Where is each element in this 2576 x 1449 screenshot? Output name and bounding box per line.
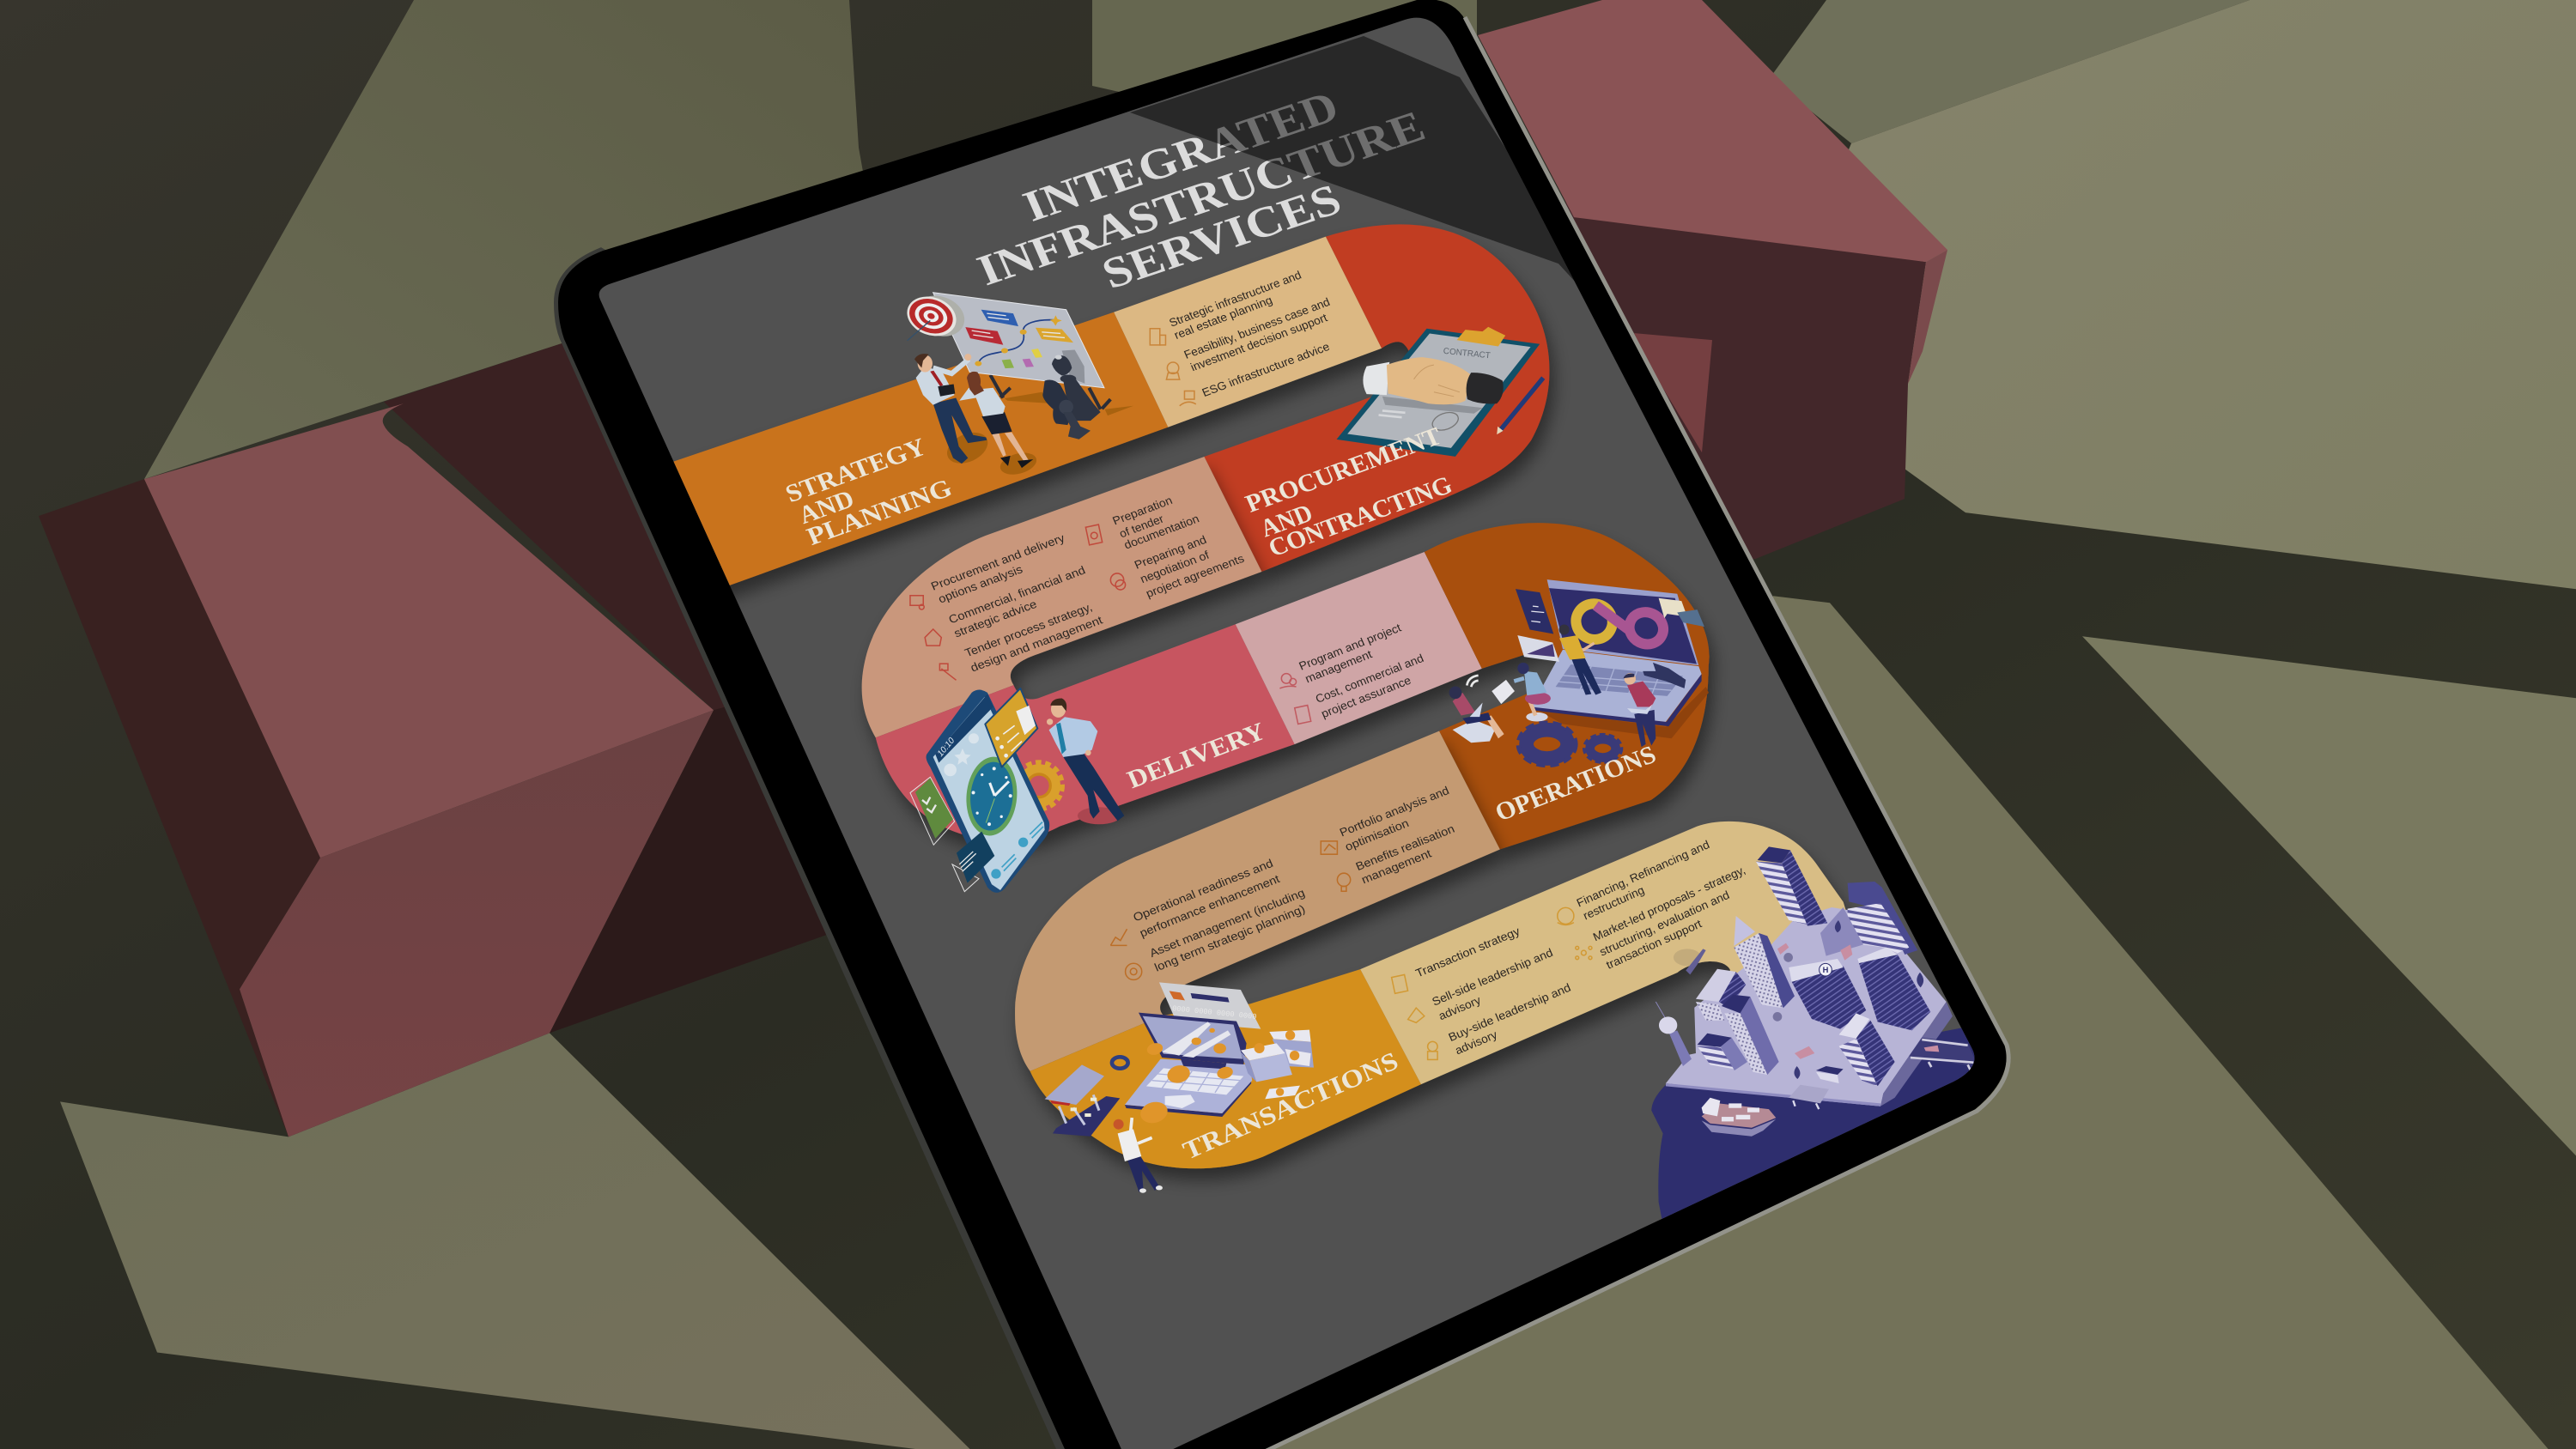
tall tower roof (1758, 846, 1790, 863)
text: operations list (1131, 784, 1456, 974)
procurement list background (862, 457, 1261, 737)
chess highlight (1055, 355, 1062, 360)
strategy list background (1114, 237, 1382, 427)
signature strip (1382, 397, 1483, 414)
trackpad (1165, 1094, 1195, 1108)
heading: strategy and planning: AND (795, 486, 859, 530)
helipad roof (1789, 959, 1844, 982)
title: INFRASTRUCTURE (970, 102, 1432, 295)
text: procurement list: documentation (1122, 512, 1201, 552)
card strip (1191, 993, 1230, 1003)
text: transactions list: structuring, evaluation and (1598, 888, 1731, 959)
icons: procurement list (910, 524, 1126, 680)
text: procurement list: of tender (1117, 512, 1166, 540)
illustration: strategy board (902, 287, 1133, 478)
laptop base edge (1125, 1081, 1251, 1117)
text: strategy list: Strategic infrastructure and (1167, 269, 1303, 330)
key lines (1558, 666, 1677, 695)
person (1114, 1118, 1163, 1193)
operations heading band (1425, 523, 1710, 849)
text: procurement list: design and management (969, 614, 1105, 675)
calendar details (995, 706, 1036, 758)
man at screen (1559, 624, 1601, 695)
key lines (1152, 1070, 1241, 1093)
land front edge (1666, 1083, 1880, 1106)
text: transactions list: Sell-side leadership and (1430, 946, 1555, 1009)
credit card (1159, 982, 1261, 1029)
text: operations list: long term strategic planning) (1152, 902, 1307, 974)
phone screen (933, 697, 1045, 890)
curved roof right (1857, 948, 1898, 963)
tablet body (554, 0, 2008, 1449)
clock second hand (986, 798, 994, 823)
tablet screen (599, 18, 1974, 1449)
contract paper (1347, 333, 1531, 448)
card number: 0000 0000 0000 0000 (1172, 1004, 1257, 1022)
heading: procurement and contracting (1242, 422, 1456, 562)
phone icons (944, 733, 979, 776)
keyboard (1146, 1068, 1243, 1094)
icons: strategy list (1150, 329, 1196, 406)
harbour water (1651, 1028, 1986, 1240)
text: transactions list: Market-led proposals - strategy, (1591, 864, 1747, 943)
infinity loop (1570, 597, 1668, 650)
wifi (1467, 676, 1479, 687)
text: procurement list: strategic advice (952, 597, 1039, 640)
phone body (927, 690, 1049, 893)
side card (1516, 589, 1553, 634)
coins (1138, 1028, 1234, 1126)
finger lines (1414, 365, 1460, 397)
big dark building centre (1792, 966, 1866, 1029)
contract label: CONTRACT (1443, 347, 1491, 361)
procurement heading band (1204, 224, 1550, 572)
pink cars (1777, 943, 1852, 1059)
text: transactions list: transaction support (1604, 917, 1704, 972)
laptop base (1531, 650, 1702, 722)
woman (959, 372, 1033, 468)
illustration: online payment laptop (1045, 982, 1314, 1193)
text: procurement list: Commercial, financial and (946, 564, 1087, 626)
text: procurement list: Tender process strategy, (963, 600, 1094, 659)
pencil (1500, 378, 1543, 431)
land side (1880, 1002, 1953, 1106)
target (907, 295, 965, 336)
text: transactions list: Transaction strategy (1413, 925, 1522, 979)
text: transactions list: restructuring (1582, 883, 1646, 922)
helipad mark: H (1823, 966, 1829, 974)
laptop hinge (1181, 1059, 1226, 1069)
text: operations list: Portfolio analysis and (1338, 784, 1451, 839)
illustration: schedule phone and clock (910, 688, 1124, 893)
icons: transactions list (1392, 907, 1592, 1059)
ribbon (1677, 609, 1704, 627)
pencil tip (1497, 427, 1504, 434)
gears (1518, 723, 1621, 766)
radio tower (1656, 1002, 1692, 1066)
chess shadow (1062, 349, 1084, 384)
loose bill (1265, 1086, 1300, 1099)
transactions list background (1360, 822, 1889, 1084)
illustration: isometric city (1651, 846, 1986, 1240)
panel: transactions band (1015, 731, 1889, 1168)
woman on box (1449, 687, 1504, 743)
man on laptop (1624, 673, 1656, 747)
heading: strategy and planning (787, 438, 951, 546)
text: procurement list: Procurement and delivery (929, 531, 1066, 593)
board (933, 293, 1104, 388)
bridge (1909, 1038, 1975, 1070)
small striped building (1698, 1034, 1747, 1070)
laptop screen frame (1139, 1013, 1247, 1064)
spire tower (1734, 916, 1795, 1008)
phone header (935, 694, 993, 763)
tablet left dark rim (554, 247, 1082, 1449)
heading: operations: OPERATIONS (1492, 741, 1660, 827)
text: procurement list: options analysis (936, 562, 1024, 606)
trees (1773, 920, 1923, 1079)
left pink block (39, 309, 945, 1137)
front right tower (1839, 1013, 1895, 1086)
heading: transactions: TRANSACTIONS (1179, 1047, 1402, 1166)
infographic on screen (649, 36, 1986, 1240)
sticky notes (1002, 349, 1042, 368)
laptop shadow (1537, 687, 1709, 738)
card chip (1170, 991, 1185, 1000)
phone lines (1002, 822, 1043, 871)
clasped hands (1387, 357, 1471, 404)
tablet grey rim (1266, 17, 2008, 1449)
text: transactions list: advisory (1453, 1028, 1499, 1057)
text: delivery list: Program and project (1297, 621, 1403, 673)
text: delivery list: management (1303, 647, 1374, 685)
contract lines (1379, 410, 1406, 417)
panel: delivery band (862, 457, 1710, 849)
market stall (1045, 1064, 1120, 1137)
board legs (990, 375, 1110, 409)
clip (1457, 327, 1505, 346)
small gear (1112, 1057, 1128, 1069)
chart card (1517, 635, 1559, 662)
laptop screen (1143, 1016, 1242, 1059)
helicopter (1674, 949, 1706, 974)
clock (963, 755, 1020, 838)
central plaza block (1820, 907, 1863, 956)
icons: delivery list (1279, 674, 1311, 724)
transactions heading band (1030, 969, 1421, 1168)
text: transactions list: Financing, Refinancing and (1575, 838, 1711, 910)
curved white building (1848, 903, 1909, 953)
top right dark building (1848, 882, 1917, 955)
helipad mark (1820, 963, 1832, 976)
phone status circles (991, 838, 1028, 879)
title: SERVICES (1095, 175, 1348, 299)
text: transactions list: Buy-side leadership and (1447, 981, 1573, 1044)
thinking man (1047, 699, 1124, 824)
money stack back (1269, 1030, 1314, 1068)
text: procurement list: Preparation (1110, 494, 1174, 527)
heading: delivery: DELIVERY (1123, 718, 1269, 794)
heading: strategy and planning: STRATEGY (781, 433, 930, 508)
phone time: 10:10 (936, 736, 957, 759)
delivery list background (1236, 552, 1482, 744)
text: strategy list: real estate planning (1172, 294, 1274, 342)
checklist paper (910, 777, 955, 845)
speech bubble (1659, 598, 1687, 618)
clock hands (990, 781, 1009, 796)
title: INTEGRATED (1017, 82, 1346, 231)
pier (1789, 1085, 1829, 1109)
text: procurement list: Preparing and (1133, 533, 1208, 572)
text: strategy list: ESG infrastructure advice (1200, 340, 1332, 399)
small house (1816, 1066, 1844, 1083)
illustration: laptop operations (1449, 579, 1709, 766)
text: strategy list: investment decision support (1188, 311, 1329, 373)
laptop base edge (1530, 674, 1702, 726)
screen glare (1162, 1022, 1230, 1058)
text: delivery list: project assurance (1319, 674, 1413, 720)
container ship (1702, 1098, 1776, 1137)
sleeve (1363, 362, 1389, 395)
text: procurement list: project agreements (1144, 552, 1246, 600)
tall tower left face (1756, 862, 1807, 925)
cuff (1467, 373, 1504, 403)
middle tower (1722, 995, 1779, 1075)
text: operations list: management (1359, 846, 1433, 886)
roadmap nodes (975, 315, 1062, 366)
roadmap path (978, 320, 1054, 363)
text: delivery list: Cost, commercial and (1314, 652, 1425, 706)
text: transactions list (1413, 838, 1747, 1057)
text: strategy list: Feasibility, business case and (1182, 295, 1332, 361)
stamp (1430, 409, 1461, 433)
text: transactions list: advisory (1437, 993, 1483, 1022)
strategy heading band (649, 312, 1168, 600)
screen reflection (1130, 36, 1631, 343)
operations list background (1015, 731, 1500, 1071)
text: procurement list (929, 494, 1246, 675)
gear (1016, 762, 1062, 809)
chess pieces (1042, 355, 1101, 440)
floor shadows (942, 392, 1133, 478)
left building (1696, 969, 1746, 1021)
text: operations list: Operational readiness and (1131, 857, 1275, 924)
wrench (1643, 663, 1686, 688)
laptop screen (1549, 588, 1697, 664)
big dark building right (1859, 955, 1930, 1030)
text: operations list: performance enhancement (1138, 872, 1282, 940)
heading: strategy and planning: PLANNING (803, 475, 957, 551)
tablet black bezel (558, 0, 2007, 1449)
laptop keys (1556, 664, 1683, 696)
text: strategy list (1167, 269, 1332, 399)
heading: procurement and contracting: CONTRACTING (1265, 471, 1456, 562)
text: operations list: optimisation (1343, 816, 1411, 853)
dark info card (952, 832, 994, 892)
document (1492, 680, 1515, 704)
illustration: contract handshake (1337, 327, 1543, 457)
woman on ball seat (1514, 663, 1551, 722)
text: procurement list: negotiation of (1138, 549, 1212, 585)
right pink block (1374, 0, 1947, 559)
dart (908, 320, 930, 341)
laptop screen frame (1547, 579, 1698, 665)
land (1666, 907, 1947, 1106)
heading: procurement and contracting: PROCUREMENT (1242, 422, 1446, 518)
heading: procurement and contracting: AND (1256, 500, 1317, 543)
calendar card (985, 688, 1037, 767)
clipboard (1337, 329, 1540, 457)
icons: operations list (1110, 841, 1351, 979)
laptop base (1125, 1059, 1252, 1113)
man (914, 354, 987, 464)
text: operations list: Benefits realisation (1354, 822, 1456, 873)
tall tower right face (1782, 850, 1827, 926)
delivery heading band (876, 624, 1295, 840)
text: operations list: Asset management (including (1147, 886, 1307, 960)
money stack front (1241, 1043, 1292, 1082)
text: delivery list (1297, 621, 1425, 720)
speech bubbles (965, 310, 1073, 345)
panel: strategy and planning (649, 224, 1550, 600)
